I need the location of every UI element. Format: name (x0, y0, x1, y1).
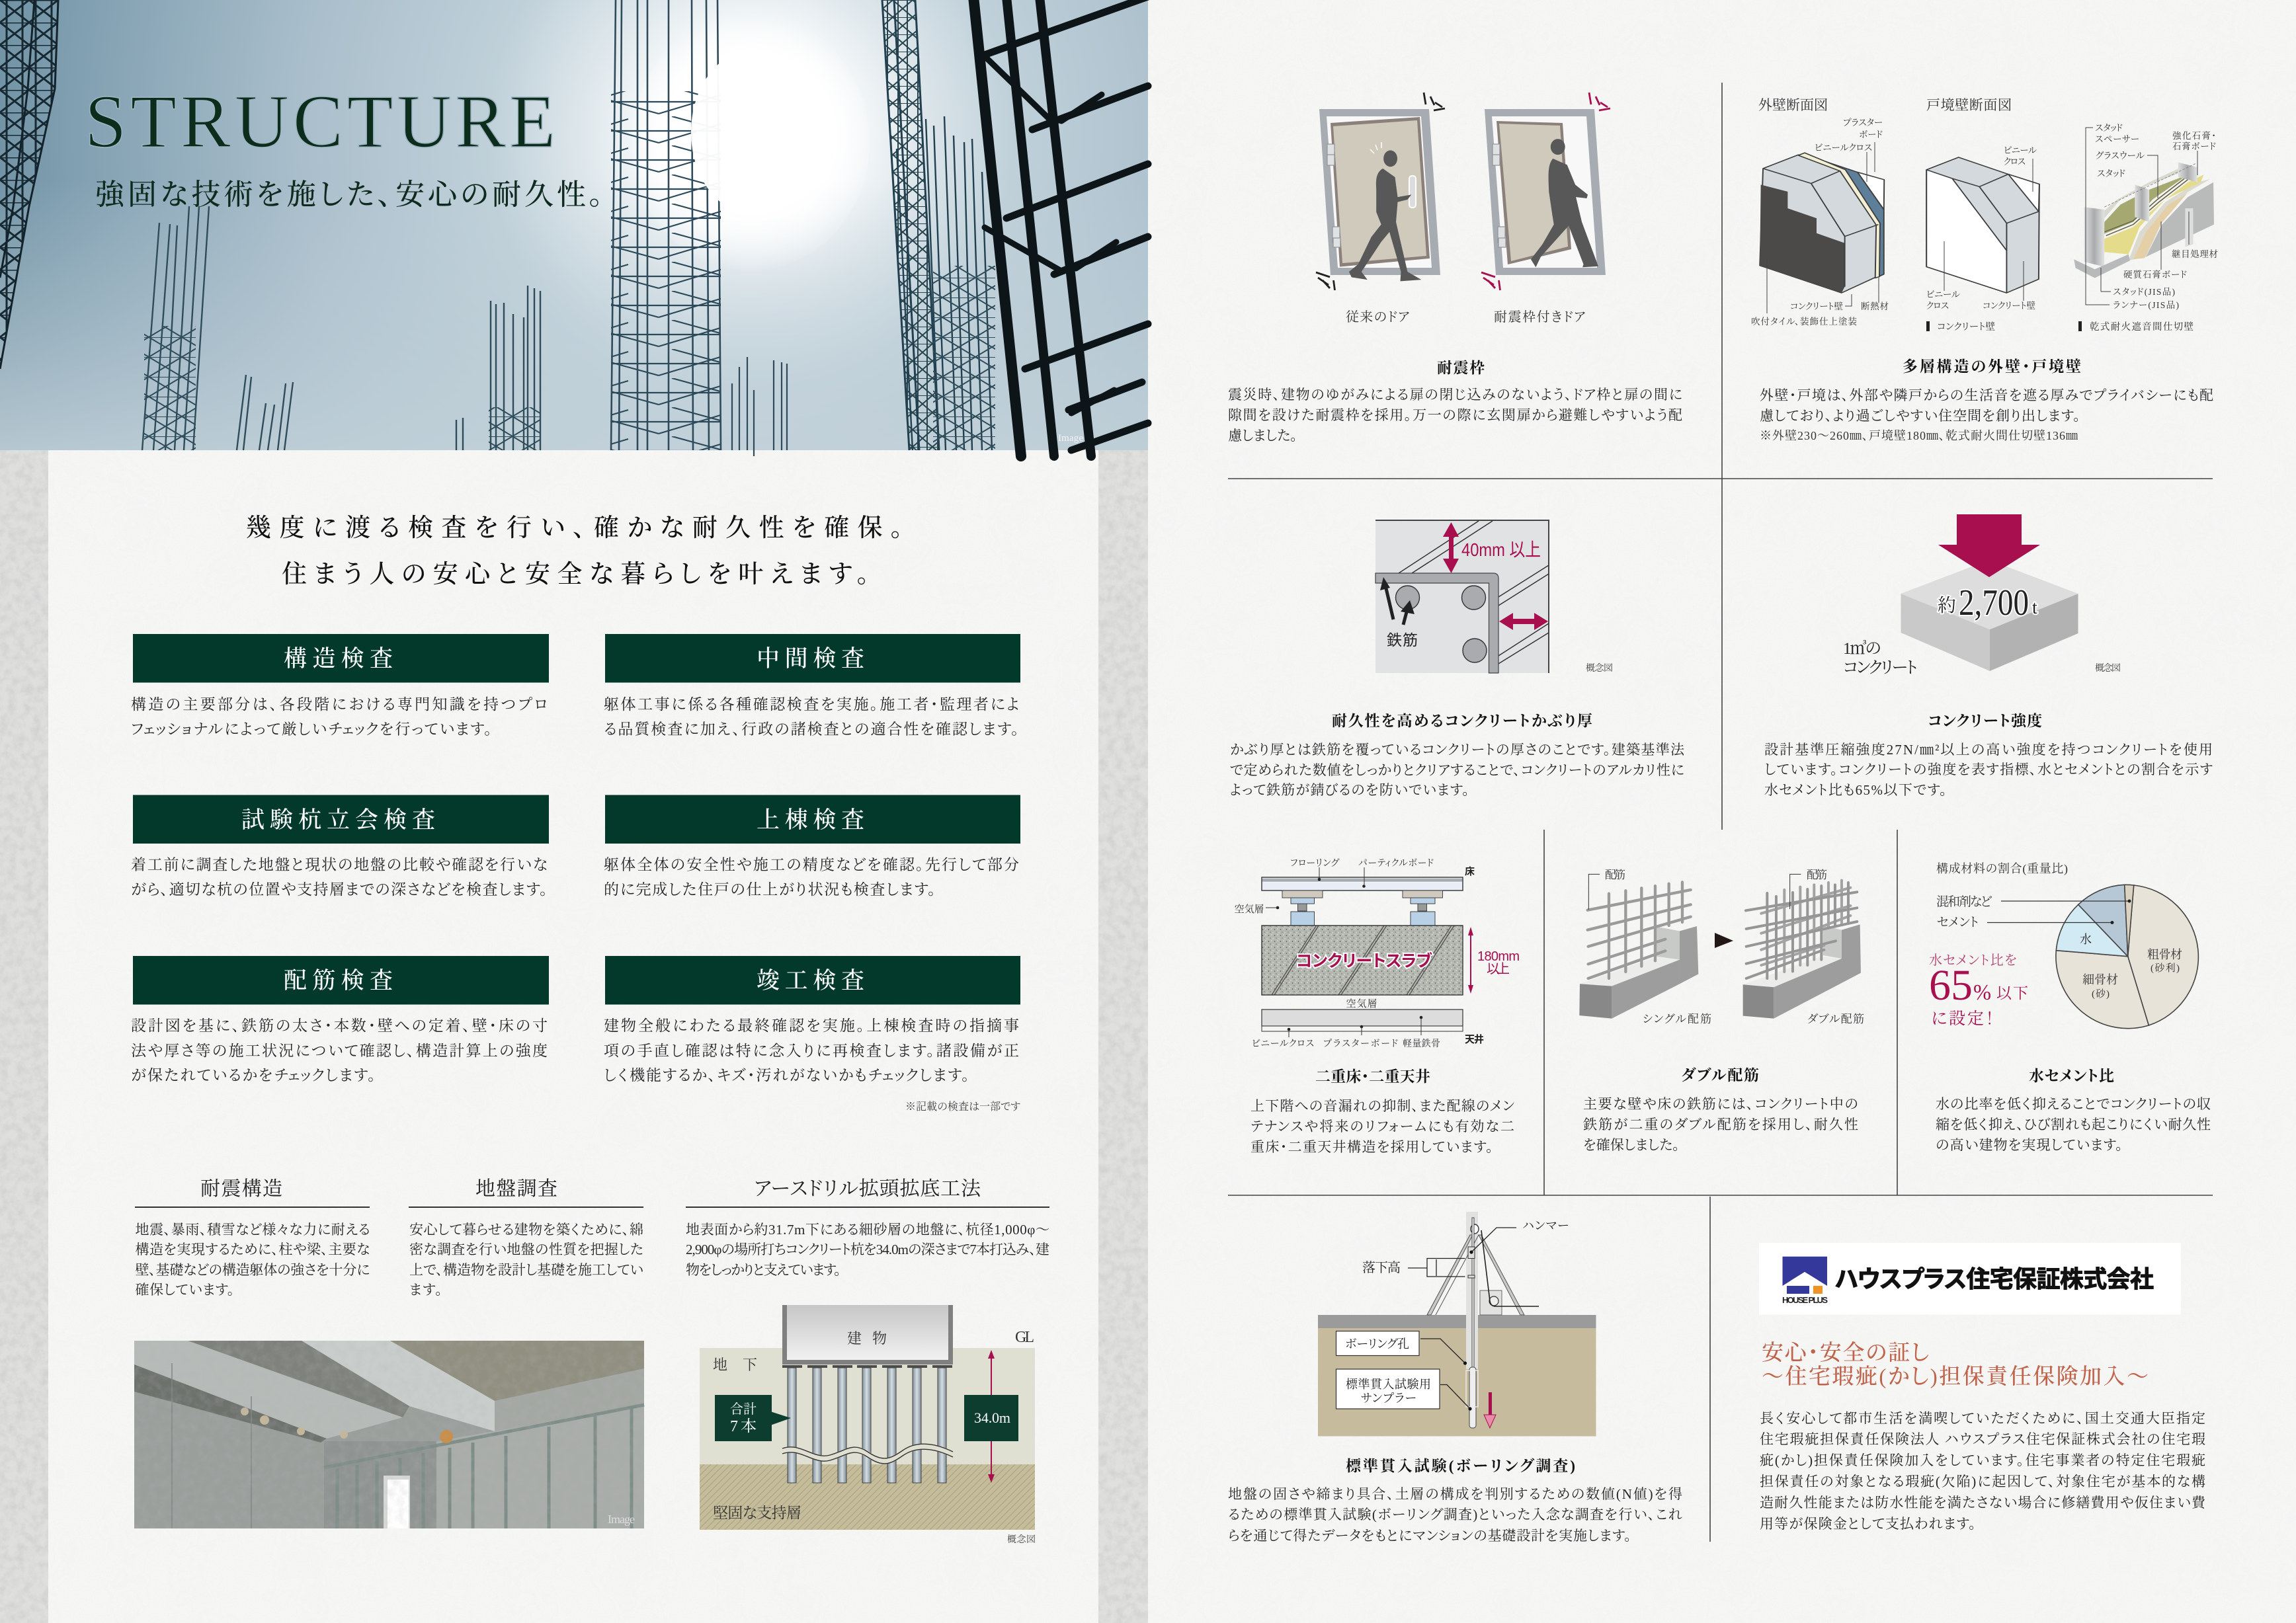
callout: 7 piles: 7本 (730, 1417, 757, 1435)
text (1936, 1096, 2211, 1153)
right rebar cluster (882, 0, 995, 450)
callout: 65%: % (1973, 980, 1991, 1005)
text (1230, 742, 1685, 798)
wall labels: スタッド (2095, 123, 2123, 133)
panel: 中間検査: 躯体工事に係る各種確認検査を実施。施工者・監理者によ (604, 696, 1019, 713)
wall labels: 硬質石膏ボード (2123, 269, 2187, 280)
wall labels: 石膏ボード (2172, 141, 2216, 151)
piles (782, 1365, 953, 1483)
building: 建 物 (847, 1330, 887, 1347)
callout: 34.0m: 34.0m (974, 1409, 1010, 1426)
wall labels: プラスター (1843, 118, 1883, 128)
label: GL: GL (1015, 1329, 1034, 1346)
diagram: exterior wall section (1760, 153, 1884, 293)
callout: 65%: に設定！ (1931, 1009, 1994, 1028)
panel: アースドリル拡頭拡底工法: 地表面から約31.7m下にある細砂層の地盤に、杭径1,000φ〜 (686, 1222, 1049, 1238)
logo: House Plus (1759, 1243, 2181, 1314)
pie labels: セメント (1937, 916, 1979, 930)
heading: コンクリート強度 (1928, 713, 2042, 729)
diagram: double floor: 以上 (1487, 961, 1510, 976)
label: exterior wall: 外壁断面図 (1758, 97, 1828, 113)
left scaffold tower (0, 0, 58, 369)
pie labels: (砂) (2092, 988, 2110, 1000)
text (1583, 1096, 1858, 1153)
text: を確保しました。 (1583, 1137, 1680, 1153)
text: 主要な壁や床の鉄筋には、コンクリート中の (1583, 1096, 1858, 1112)
wall labels: コンクリート壁 (1983, 300, 2035, 311)
label: rebar left: 配筋 (1605, 869, 1625, 881)
image note: Image (608, 1513, 635, 1526)
dividers (1228, 83, 2213, 1542)
diagram: pile foundation (700, 1305, 1036, 1545)
panel: 竣工検査: 竣工検査 (757, 968, 864, 994)
wall labels: 強化石膏・ (2172, 130, 2216, 141)
value: 2,700t: 2,700 (1959, 582, 2029, 623)
text (1228, 1486, 1682, 1544)
panel: 竣工検査: 項の手直し確認は特に念入りに再検査します。諸設備が正 (604, 1043, 1019, 1059)
title: STRUCTURE (85, 79, 555, 163)
text: 鉄筋が二重のダブル配筋を採用し、耐久性 (1583, 1117, 1858, 1132)
central rebar tower (611, 0, 787, 456)
text: ※外壁230〜260㎜、戸境壁180㎜、乾式耐火間仕切壁136㎜ (1760, 429, 2078, 442)
panel: 構造検査: 構造検査 (284, 646, 393, 672)
wall labels: スペーサー (2095, 134, 2139, 144)
panel: 住宅瑕疵担保責任保険 (1759, 1243, 2206, 1532)
label: party wall: 戸境壁断面図 (1926, 97, 2012, 113)
panel: 地盤調査 (409, 1178, 643, 1298)
text: 担保責任の対象となる瑕疵(欠陥)に起因して、対象住宅が基本的な構 (1760, 1474, 2205, 1489)
diagram: double floor: 軽量鉄骨 (1403, 1038, 1440, 1049)
panel: 耐震構造: 地震、暴雨、積雪など様々な力に耐える (135, 1222, 370, 1238)
wall labels: ランナー(JIS品) (2113, 300, 2179, 310)
panel: 地盤調査: 安心して暮らせる建物を築くために、綿 (409, 1222, 643, 1238)
diagram: boring test: 落下高 (1362, 1260, 1401, 1275)
pie labels: (砂利) (2151, 963, 2180, 974)
panel: 構造検査 (131, 634, 549, 738)
text: 隙間を設けた耐震枠を採用。万一の際に玄関扉から避難しやすいよう配 (1228, 407, 1682, 423)
pie labels: 粗骨材 (2147, 948, 2182, 961)
wall labels: ビニール (2004, 145, 2037, 155)
panel: 配筋検査: が保たれているかをチェックします。 (131, 1067, 376, 1084)
callout: 34.0m (964, 1395, 1018, 1441)
panel: 試験杭立会検査: 着工前に調査した地盤と現状の地盤の比較や確認を行いな (131, 857, 548, 873)
diagram: double floor: 床 (1465, 866, 1475, 877)
panel: 構造検査: フェッショナルによって厳しいチェックを行っています。 (131, 721, 492, 738)
label: 1m3 concrete (1843, 639, 1918, 677)
text: 住宅瑕疵担保責任保険法人 ハウスプラス住宅保証株式会社の住宅瑕 (1760, 1431, 2205, 1447)
text: かぶり厚とは鉄筋を覆っているコンクリートの厚さのことです。建築基準法 (1230, 742, 1685, 758)
wall labels: スタッド (2097, 169, 2125, 178)
panel: 配筋検査: 設計図を基に、鉄筋の太さ・本数・壁への定着、壁・床の寸 (131, 1017, 548, 1034)
diagram: double floor: ビニールクロス (1252, 1039, 1314, 1049)
heading: 二重床・二重天井 (1315, 1068, 1430, 1085)
heading: insurance: 安心・安全の証し (1762, 1341, 1929, 1365)
panel: 地盤調査: 密な調査を行い地盤の性質を把握した (409, 1242, 643, 1257)
panel: 試験杭立会検査: がら、適切な杭の位置や支持層までの深さなどを検査します。 (131, 881, 548, 898)
diagram: cover thickness: 40mm 以上 (1461, 539, 1541, 560)
diagram: boring test: ボーリング孔 (1345, 1337, 1409, 1351)
callout: 7 piles: 合計 (730, 1402, 757, 1417)
panel: 耐震構造: 壁、基礎などの構造躯体の強さを十分に (135, 1262, 370, 1278)
label: double rebar: ダブル配筋 (1807, 1013, 1864, 1025)
panel: 多層構造の外壁・戸境壁 (1751, 97, 2218, 442)
diagram: double floor: コンクリートスラブ (1296, 951, 1432, 970)
text: 縮を低く抑え、ひび割れも起こりにくい耐久性 (1936, 1117, 2211, 1132)
diagram: boring test: サンプラー (1361, 1392, 1416, 1405)
label: 1m3 concrete: コンクリート (1843, 659, 1918, 677)
panel: 中間検査: 中間検査 (757, 646, 864, 672)
panel: 耐震構造: 耐震構造 (200, 1178, 282, 1200)
sun core (691, 50, 817, 215)
panel: 構造検査: 構造の主要部分は、各段階における専門知識を持つプロ (131, 696, 548, 713)
wall labels: コンクリート壁 (1937, 321, 1995, 333)
diagram: cover thickness: 鉄筋 (1387, 631, 1418, 649)
building (782, 1305, 953, 1365)
pie labels: 水 (2080, 933, 2092, 946)
panel: 配筋検査: 法や厚さ等の施工状況について確認し、構造計算上の強度 (131, 1043, 548, 1059)
lead headline (246, 514, 903, 588)
icon: conventional door (1316, 93, 1445, 290)
image note: Image (1058, 433, 1083, 444)
text: よって鉄筋が錆びるのを防いでいます。 (1230, 782, 1469, 798)
panel: アースドリル拡頭拡底工法 (686, 1178, 1049, 1278)
label: 地下: 地 下 (713, 1357, 757, 1373)
label: single rebar: シングル配筋 (1643, 1013, 1711, 1025)
diagram: cover thickness (1375, 520, 1549, 673)
leader lines (1767, 128, 2197, 313)
panel: 竣工検査: しく機能するか、キズ・汚れがないかもチェックします。 (604, 1067, 969, 1084)
wall labels: コンクリート壁 (1790, 301, 1843, 311)
text: 設計基準圧縮強度27N/㎜²以上の高い強度を持つコンクリートを使用 (1764, 742, 2213, 758)
label: seismic door: 耐震枠付きドア (1494, 309, 1585, 325)
diagram: dry partition (2074, 162, 2214, 278)
text: 慮しており、より過ごしやすい住空間を創り出します。 (1760, 408, 2080, 424)
diagram: double floor: パーティクルボード (1358, 858, 1434, 869)
arrow: single to double (1715, 933, 1733, 948)
panel: 地盤調査: 地盤調査 (475, 1178, 557, 1200)
footnote: inspections: ※記載の検査は一部です (905, 1101, 1020, 1113)
panel: 水セメント比 (1929, 862, 2211, 1153)
panel: 配筋検査: 配筋検査 (284, 968, 393, 994)
caption: concept: 概念図 (1007, 1534, 1036, 1545)
panel: コンクリートかぶり厚 (1230, 520, 1685, 798)
wall labels: 断熱材 (1861, 301, 1889, 311)
text: るための標準貫入試験(ボーリング調査)といった入念な調査を行い、これ (1228, 1507, 1682, 1523)
text: 重床・二重天井構造を採用しています。 (1250, 1139, 1493, 1155)
photo: concrete interior (134, 1341, 644, 1528)
panel: 竣工検査 (604, 956, 1020, 1084)
label: rebar right: 配筋 (1807, 869, 1827, 881)
wall labels: スタッド(JIS品) (2113, 287, 2175, 297)
panel: 中間検査 (604, 634, 1020, 738)
diagram: double floor (1234, 858, 1520, 1049)
diagram: double floor: 180mm (1477, 949, 1520, 964)
diagram: boring test: 標準貫入試験用 (1346, 1378, 1431, 1391)
caption: concept: 概念図 (2095, 662, 2121, 674)
label: conventional door: 従来のドア (1346, 309, 1409, 325)
sun glow (632, 13, 870, 271)
heading: 多層構造の外壁・戸境壁 (1903, 358, 2081, 375)
pie labels: 細骨材 (2082, 973, 2118, 986)
hero photo: rebar against the sun (0, 0, 1148, 456)
text: 用等が保険金として支払われます。 (1760, 1516, 1976, 1532)
panel: 上棟検査 (604, 795, 1020, 898)
text: 造耐久性能または防水性能を満たさない場合に修繕費用や仮住まい費 (1760, 1495, 2206, 1511)
text: の高い建物を実現しています。 (1936, 1137, 2123, 1153)
logo: House Plus: HOUSE PLUS (1782, 1295, 1828, 1305)
icon: seismic door (1481, 93, 1610, 290)
wall labels: ボード (1859, 130, 1883, 139)
label: 1m3 concrete: 1㎥の (1843, 639, 1881, 658)
panel: 竣工検査: 建物全般にわたる最終確認を実施。上棟検査時の指摘事 (604, 1017, 1019, 1034)
callout: 7 piles (715, 1395, 791, 1441)
text: らを通じて得たデータをもとにマンションの基礎設計を実施します。 (1228, 1528, 1631, 1544)
heading: insurance: 〜住宅瑕疵(かし)担保責任保険加入〜 (1762, 1365, 2149, 1389)
wall labels: クロス (2004, 157, 2026, 167)
caption: concept: 概念図 (1586, 662, 1613, 674)
diagram: double floor: 空気層 (1346, 998, 1377, 1009)
text (1760, 1411, 2206, 1532)
callout: 65%: 65 (1929, 961, 1973, 1009)
diagram: party wall section (1926, 157, 2039, 293)
wall labels: ビニール (1926, 290, 1961, 299)
diagram: boring test (1318, 1212, 1596, 1436)
callout: 65%: 水セメント比を (1929, 953, 2017, 968)
text: テナンスや将来のリフォームにも有効な二 (1250, 1119, 1514, 1134)
wall labels: クロス (1926, 301, 1949, 311)
panel: 配筋検査 (131, 956, 549, 1084)
panel: アースドリル拡頭拡底工法: 物をしっかりと支えています。 (686, 1262, 841, 1278)
text (1760, 387, 2213, 442)
text: 疵(かし)担保責任保険加入をしています。住宅事業者の特定住宅瑕疵 (1760, 1452, 2205, 1468)
text: 上下階への音漏れの抑制、また配線のメン (1250, 1098, 1514, 1114)
panel: 耐震構造: 構造を実現するために、柱や梁、主要な (135, 1242, 370, 1257)
text: 慮しました。 (1228, 428, 1297, 444)
value: 2,700t: t (2032, 598, 2037, 618)
diagram: boring test: ハンマー (1522, 1219, 1569, 1232)
wall labels (1751, 118, 2218, 333)
value: 2,700t: 約 (1938, 595, 1956, 616)
panel: 二重床・二重天井 (1234, 858, 1520, 1155)
logo: House Plus: ハウスプラス住宅保証株式会社 (1835, 1265, 2154, 1292)
panel: 標準貫入試験 (1228, 1212, 1682, 1544)
text: 水の比率を低く抑えることでコンクリートの収 (1936, 1096, 2211, 1112)
diagram: double floor: フローリング (1290, 858, 1340, 869)
panel: アースドリル拡頭拡底工法: 2,900φの場所打ちコンクリート杭を34.0mの深さまで7本打込み、建 (686, 1242, 1049, 1257)
panel: アースドリル拡頭拡底工法: アースドリル拡頭拡底工法 (754, 1178, 981, 1200)
panel: 耐震枠 (1228, 93, 1682, 444)
panel: ダブル配筋 (1579, 869, 1864, 1153)
panel: 試験杭立会検査: 試験杭立会検査 (241, 807, 435, 833)
wall labels: 乾式耐火遮音間仕切壁 (2090, 321, 2194, 333)
text (1764, 742, 2213, 798)
label: bearing stratum: 堅固な支持層 (713, 1505, 801, 1521)
callout: 65% (1929, 953, 2028, 1028)
text: 外壁・戸境は、外部や隣戸からの生活音を遮る厚みでプライバシーにも配 (1760, 387, 2213, 403)
panel: コンクリート強度 (1764, 514, 2213, 798)
text: 地盤の固さや締まり具合、土層の構成を判別するための数値(N値)を得 (1228, 1486, 1682, 1502)
text: しています。コンクリートの強度を表す指標、水とセメントとの割合を示す (1764, 762, 2213, 777)
text: 震災時、建物のゆがみによる扉の閉じ込みのないよう、ドア枠と扉の間に (1228, 387, 1682, 403)
text (1228, 387, 1682, 444)
heading: 標準貫入試験(ボーリング調査) (1346, 1458, 1575, 1474)
diagram: double rebar (1743, 874, 1861, 1019)
diagram: double floor: 天井 (1465, 1034, 1484, 1045)
heading: 耐久性を高めるコンクリートかぶり厚 (1332, 713, 1592, 729)
arrow: depth (988, 1350, 995, 1483)
pie labels (1936, 894, 2182, 1000)
text (1250, 1098, 1514, 1155)
text: で定められた数値をしっかりとクリアすることで、コンクリートのアルカリ性に (1230, 762, 1684, 778)
diagram: double floor: プラスターボード (1323, 1039, 1398, 1049)
panel: 地盤調査: ます。 (409, 1282, 442, 1298)
diagram: concrete cube (1901, 560, 2078, 671)
wall labels: 継目処理材 (2172, 249, 2218, 259)
diagram: single rebar (1579, 874, 1698, 1019)
pie labels: 混和剤など (1936, 894, 1992, 909)
arrow: load (1938, 514, 2040, 577)
panel: 地盤調査: 上で、構造物を設計し基礎を施工してい (409, 1262, 643, 1278)
text: 水セメント比も65%以下です。 (1764, 782, 1947, 798)
heading: insurance (1762, 1341, 2149, 1389)
heading: ダブル配筋 (1681, 1067, 1759, 1084)
panel: 耐震構造 (135, 1178, 370, 1298)
panel: 上棟検査: 的に完成した住戸の仕上がり状況も検査します。 (604, 881, 936, 898)
label: chart title: 構成材料の割合(重量比) (1936, 862, 2068, 876)
wall labels: 吹付タイル、装飾仕上塗装 (1751, 316, 1857, 327)
heading: 水セメント比 (2029, 1068, 2114, 1084)
panel: 耐震構造: 確保しています。 (135, 1282, 234, 1298)
subtitle: 強固な技術を施した、安心の耐久性。 (95, 178, 604, 211)
wall labels: グラスウール (2096, 151, 2145, 161)
diagram: double floor: 空気層 (1234, 903, 1264, 915)
rebar cage, lower centre (456, 286, 540, 450)
panel: 上棟検査: 躯体全体の安全性や施工の精度などを確認。先行して部分 (604, 857, 1019, 873)
thick black rebar (973, 0, 1148, 456)
rebar cage, lower left (142, 206, 293, 450)
wall labels: ビニールクロス (1815, 143, 1872, 153)
pie chart (2056, 885, 2198, 1029)
panel: 試験杭立会検査 (131, 795, 549, 898)
text: 長く安心して都市生活を満喫していただくために、国土交通大臣指定 (1760, 1411, 2205, 1427)
lead headline: 幾度に渡る検査を行い、確かな耐久性を確保。 (246, 514, 903, 542)
panel: 上棟検査: 上棟検査 (757, 807, 864, 833)
lead headline: 住まう人の安心と安全な暮らしを叶えます。 (282, 561, 870, 588)
callout: 65%: 以下 (1996, 985, 2028, 1002)
heading: 耐震枠 (1437, 360, 1485, 376)
panel: 中間検査: る品質検査に加え、行政の諸検査との適合性を確認します。 (604, 721, 1019, 738)
